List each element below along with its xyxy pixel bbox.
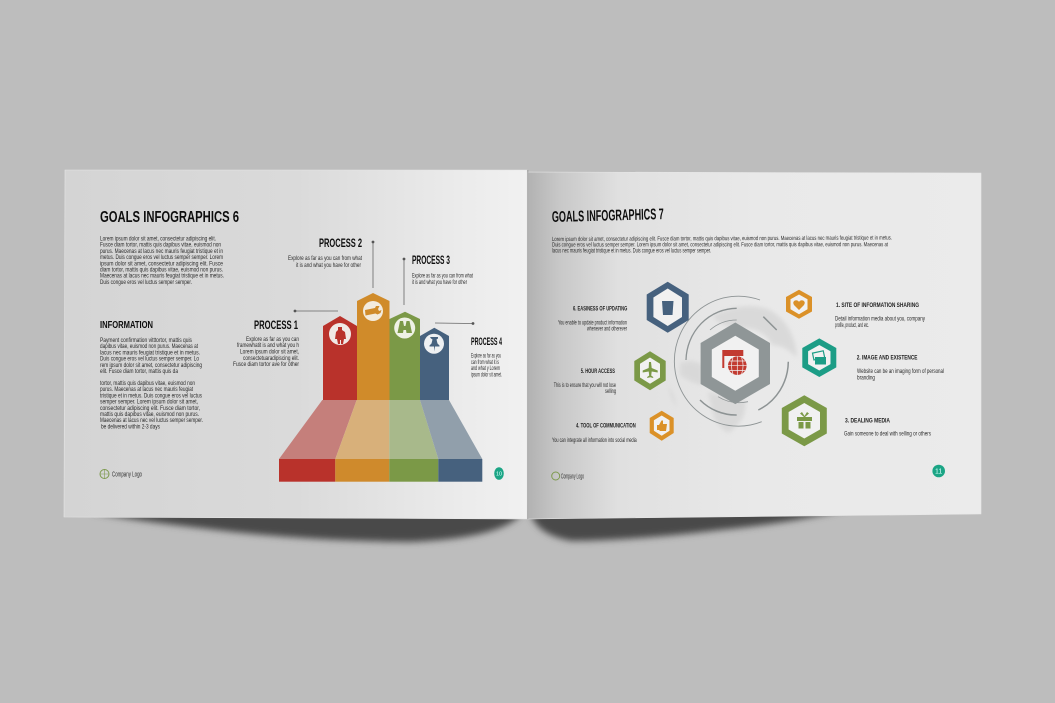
hexagon: tool of communication — [650, 411, 674, 441]
hexagon: dealing media — [782, 395, 827, 446]
intro paragraph: Lorem ipsum dolor sit amet, consectetur adipiscing elit. Fusce diam tortor, mattis quis dapibus vitae, euismod non purus. Maecenas at lacus nec mauris feugiat tristique et in metus. — [552, 236, 892, 243]
intro paragraph: ipsum dolor sit amet, consectetur adipiscing elit. Fusce — [100, 261, 224, 267]
intro paragraph: Fusce diam tortor, mattis quis dapibus vitae, euismod non — [100, 243, 221, 249]
column: process 4 blue — [420, 328, 449, 400]
hexagon: image and existence — [802, 338, 836, 377]
intro paragraph — [552, 236, 892, 254]
intro paragraph: lacus nec mauris feugiat tristique et in metus. Duis congue eros vel luctus semper semper. — [552, 248, 711, 254]
icon: thumbs up — [657, 420, 667, 431]
intro paragraph: purus. Maecenas at lacus nec mauris feugiat tristique et in — [100, 249, 223, 255]
icon: heart — [793, 300, 805, 310]
spine gap — [527, 170, 528, 519]
panel: left page — [64, 170, 527, 519]
information paragraph two: consectetur adipiscing elit. Fusce diam tortor, — [100, 406, 200, 412]
central hexagon — [701, 322, 770, 404]
information paragraph two: mattis quis dapibus vitae, euismod non purus. — [100, 412, 199, 418]
information paragraph two: Maecenas at lacus nec vel luctus semper semper. — [100, 418, 203, 424]
label: 2 image and existence: 2. IMAGE AND EXISTENCE — [857, 354, 918, 361]
hexagon: hour access — [634, 351, 666, 390]
label: 4 tool of communication: 4. TOOL OF COMMUNICATION — [576, 422, 636, 429]
panel: left page: PROCESS 4 — [471, 336, 502, 348]
heading: information: INFORMATION — [100, 319, 153, 331]
information paragraph one: dapibus vitae, euismod non purus. Maecenas at — [100, 344, 198, 350]
company logo left: Company Logo — [112, 472, 142, 478]
funnel perspective surfaces — [279, 400, 482, 459]
information paragraph one: lacus nec mauris feugiat tristique et in metus. — [100, 350, 200, 356]
label: 5 hour access: 5. HOUR ACCESS — [581, 368, 615, 375]
label: process 2: PROCESS 2 — [319, 238, 362, 250]
information paragraph one: Payment confirmation vitttortor, mattis quis — [100, 338, 192, 344]
information paragraph one — [100, 338, 202, 375]
label: 1 site of information sharing: 1. SITE OF INFORMATION SHARING — [836, 302, 919, 309]
information paragraph one: rem ipsum dolor sit amet, consectetur adipiscing — [100, 363, 202, 369]
central rings — [674, 296, 788, 426]
label: process 4: and what y Lorem — [471, 366, 500, 372]
left page text — [100, 209, 502, 478]
column: process 3 green — [390, 312, 420, 400]
label: process 2: it is and what you have for other — [296, 263, 361, 269]
information paragraph one: Duis congue eros vel luctus semper semper. Lo — [100, 357, 200, 363]
chart: process funnel columns — [279, 293, 482, 482]
world map background — [668, 306, 797, 433]
label: 4 tool of communication — [552, 422, 637, 444]
label: process 4 — [471, 336, 502, 378]
label: 5 hour access: selling — [605, 389, 616, 395]
column: process 1 red — [323, 316, 357, 400]
company logo left — [100, 470, 142, 478]
information paragraph two — [100, 381, 203, 430]
label: process 2 — [288, 238, 362, 269]
label: process 1: PROCESS 1 — [254, 320, 298, 332]
heading: goals infographics 7: GOALS INFOGRAPHICS 7 — [552, 206, 664, 226]
label: 1 site of information sharing: profile, product, and etc. — [835, 323, 869, 329]
information paragraph two: tristique et in metus. Duis congue eros vel luctus — [100, 393, 202, 399]
leader lines — [294, 241, 474, 325]
label: 6 easiness of updating: whenever and otherever — [586, 326, 627, 332]
hexagon: easiness of updating — [647, 282, 689, 333]
icon: wrench — [365, 306, 382, 316]
icon: web globe — [722, 350, 747, 375]
page number 11: 11 — [935, 468, 942, 476]
label: process 1: Lorem ipsum dolor sit amet, — [240, 350, 299, 356]
left page paper — [64, 170, 527, 519]
label: process 4: can from what it is — [471, 360, 499, 366]
label: 3 dealing media — [844, 418, 931, 438]
heading: goals infographics 6: GOALS INFOGRAPHICS 6 — [100, 209, 239, 226]
icon: binoculars — [398, 321, 412, 333]
label: 4 tool of communication: You can integrate all information into social media — [552, 438, 637, 444]
label: 5 hour access: This is to ensure that you will not lose — [554, 383, 616, 389]
company logo right — [552, 472, 584, 480]
label: process 3 — [412, 255, 473, 286]
icon: figure — [335, 327, 346, 344]
label: process 3: Explore as far as you can from what — [412, 274, 473, 280]
information paragraph one: elit. Fusce diam tortor, mattis quis da — [100, 369, 179, 375]
intro paragraph — [100, 236, 224, 286]
label: 3 dealing media: Gain someone to deal with selling or others — [844, 432, 931, 438]
label: process 1: framewhatit is and what you h — [237, 343, 299, 349]
label: 6 easiness of updating — [558, 306, 627, 332]
label: process 2: Explore as far as you can from what — [288, 256, 362, 262]
label: 5 hour access — [554, 368, 616, 395]
label: process 1 — [233, 320, 299, 368]
label: 2 image and existence — [857, 354, 944, 382]
icon: gift box — [797, 412, 812, 428]
intro paragraph: Duis congue eros vel luctus semper semper. — [100, 280, 192, 286]
information paragraph two: tortor, mattis quis dapibus vitae, euismod non — [100, 381, 195, 387]
page number 10 — [494, 467, 504, 480]
label: process 3: it is and what you have for other — [412, 280, 467, 286]
page shadows — [90, 508, 850, 542]
column: process 2 orange — [357, 293, 390, 400]
information paragraph two: semper semper. Lorem ipsum dolor sit amet, — [100, 400, 198, 406]
label: 1 site of information sharing: Detail information media about you, company — [835, 316, 925, 322]
intro paragraph: metus. Duis congue eros vel luctus semper semper. Lorem — [100, 255, 223, 261]
label: process 1: Explore as far as you can — [246, 337, 299, 343]
label: process 4: Explore as far as you — [471, 354, 501, 360]
label: process 1: Fusce diam tortor ave for other — [233, 362, 299, 368]
information paragraph two: purus. Maecenas at lacus nec mauris feugiat — [100, 387, 193, 393]
icon: bucket bag — [662, 301, 674, 315]
right page paper — [528, 172, 981, 519]
icon: pin — [430, 337, 440, 352]
label: process 4: ipsum dolor sit amet. — [471, 372, 502, 378]
right page text: Company Logo — [561, 474, 584, 480]
label: process 3: PROCESS 3 — [412, 255, 450, 267]
page number 11 — [932, 465, 945, 477]
page number 10: 10 — [496, 472, 502, 478]
intro paragraph: diam tortor, mattis quis dapibus vitae, euismod non purus. — [100, 268, 223, 274]
label: 6 easiness of updating: You enable to update product information — [558, 321, 627, 327]
right page text — [552, 206, 944, 480]
hexagon: site of information sharing — [786, 290, 812, 319]
icon: image cards — [812, 351, 826, 364]
intro paragraph: Maecenas at lacus nec mauris feugiat tristique et in metus. — [100, 274, 224, 280]
label: process 1: consectetuaradipiscing elit. — [243, 356, 299, 362]
label: 2 image and existence: branding — [857, 376, 875, 382]
label: 6 easiness of updating: 6. EASINESS OF UPDATING — [573, 306, 627, 313]
label: 1 site of information sharing — [835, 302, 925, 329]
panel: right page — [528, 172, 981, 519]
label: 2 image and existence: Website can be an imaging form of personal — [857, 369, 944, 375]
intro paragraph: Lorem ipsum dolor sit amet, consectetur adipiscing elit. — [100, 236, 216, 242]
icon: plane — [643, 362, 658, 378]
funnel front base — [279, 459, 482, 482]
label: 3 dealing media: 3. DEALING MEDIA — [845, 418, 890, 425]
intro paragraph: Duis congue eros vel luctus semper semper. Lorem ipsum dolor sit amet, consectetur adipiscing elit. Fusce diam tortor, mattis quis dapibus vitae, euismod non purus. Maecenas at — [552, 242, 888, 248]
information paragraph two: be delivered within 2-3 days — [101, 424, 160, 430]
